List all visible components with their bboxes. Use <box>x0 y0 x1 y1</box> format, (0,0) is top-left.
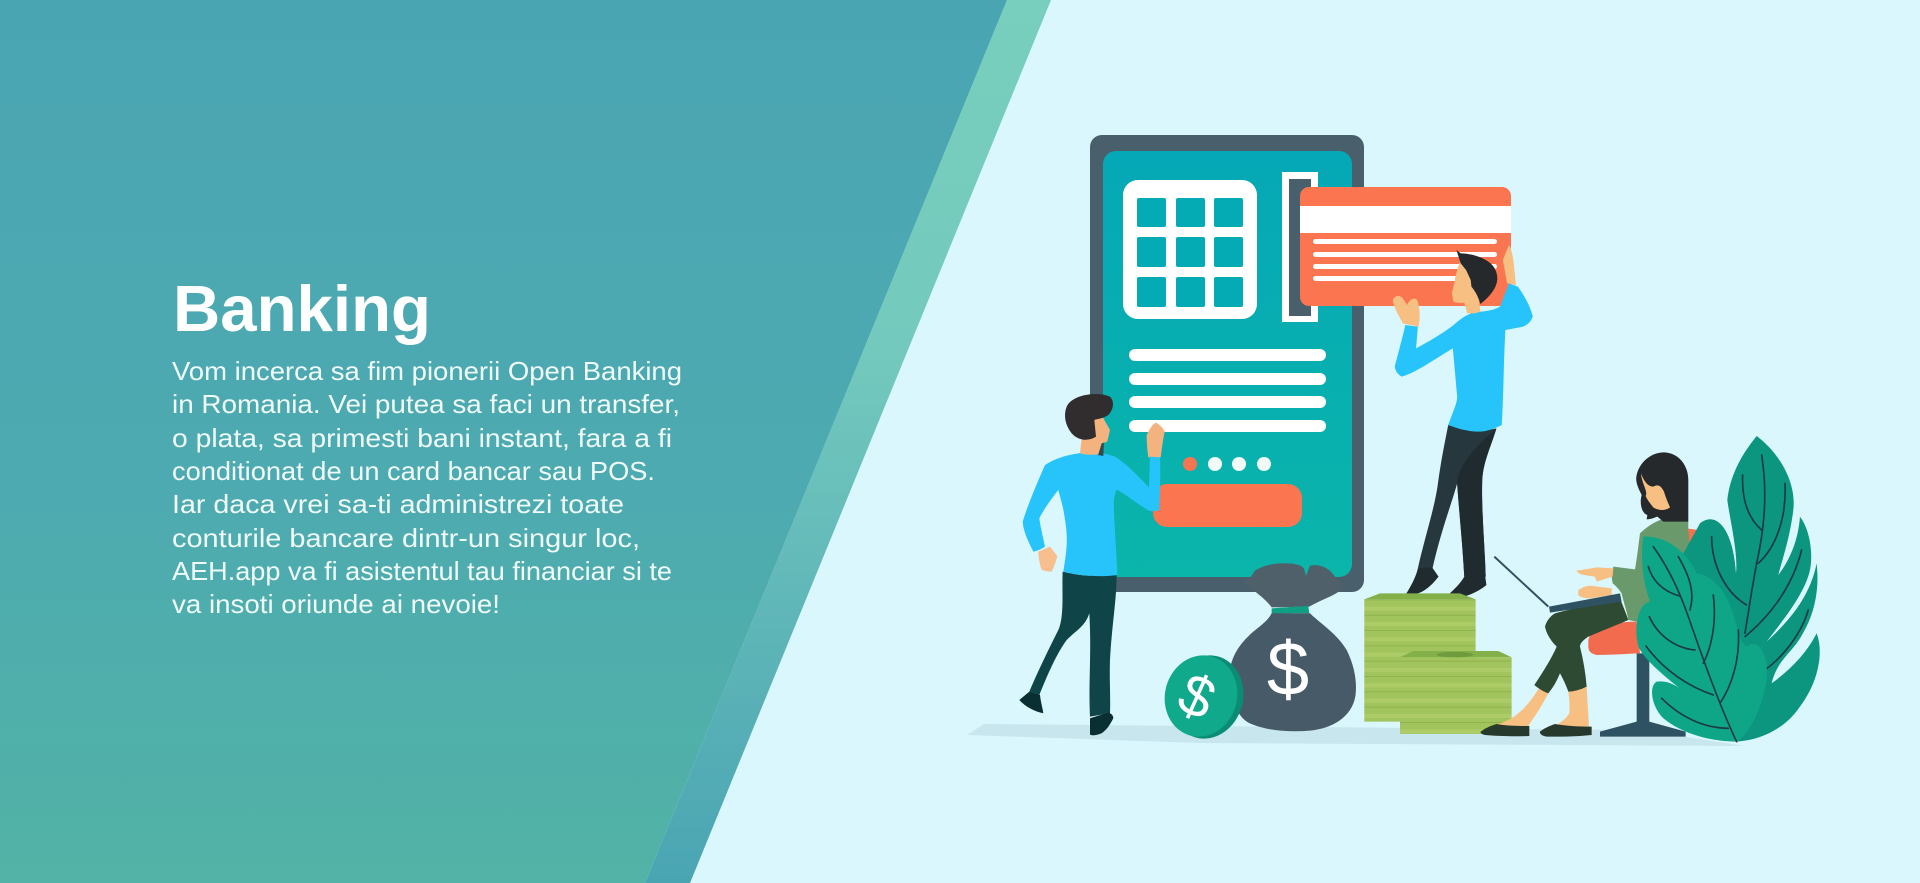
chair back <box>1677 528 1698 553</box>
shirt <box>1023 452 1160 576</box>
face <box>1641 473 1670 510</box>
money bag <box>1229 563 1356 731</box>
hands <box>1576 567 1613 582</box>
hair <box>1065 394 1113 440</box>
body text block: in Romania. Vei putea sa faci un transfer, <box>172 389 680 419</box>
lower hand <box>1038 547 1057 572</box>
raised hand <box>1393 296 1420 327</box>
coin <box>1156 647 1253 747</box>
body text block: conditionat de un card bancar sau POS. <box>172 456 655 486</box>
body text block: Iar daca vrei sa-ti administrezi toate <box>172 489 624 519</box>
hair <box>1636 452 1688 522</box>
back leaf <box>1683 436 1820 742</box>
chair seat <box>1588 622 1640 655</box>
body text block: va insoti oriunde ai nevoie! <box>172 589 500 619</box>
keypad <box>1123 180 1257 319</box>
device frame <box>1090 135 1364 592</box>
legs <box>1497 687 1548 726</box>
raised hand <box>1147 423 1165 457</box>
phone device <box>1090 135 1364 592</box>
pin dots <box>1183 457 1271 471</box>
front stack <box>1400 651 1512 734</box>
shirt <box>1395 283 1533 432</box>
shoes <box>1481 724 1529 736</box>
legs <box>1418 425 1496 577</box>
body text block: Vom incerca sa fim pionerii Open Banking <box>172 356 682 386</box>
device screen <box>1103 151 1352 577</box>
title: Banking <box>173 272 431 345</box>
card slot <box>1282 172 1318 322</box>
accent diagonal strip <box>645 0 1051 883</box>
left teal panel <box>0 0 1007 883</box>
dollar sign on bag: $ <box>1267 627 1309 712</box>
body text block <box>172 356 682 619</box>
trousers <box>1029 572 1117 717</box>
laptop <box>1494 557 1622 613</box>
man in front of device <box>1019 394 1165 735</box>
chair back lower part <box>1658 603 1672 622</box>
screen text lines <box>1129 349 1326 432</box>
bag tie <box>1272 606 1309 614</box>
trousers <box>1534 598 1628 693</box>
shoes <box>1405 567 1439 595</box>
front leaf <box>1636 537 1767 742</box>
hand on card top <box>1503 245 1516 285</box>
bank card <box>1300 187 1511 306</box>
face <box>1452 262 1480 313</box>
bag knot <box>1243 563 1343 607</box>
shoes <box>1019 692 1043 713</box>
sweater <box>1612 519 1693 622</box>
body text block: conturile bancare dintr-un singur loc, <box>172 523 640 553</box>
woman on chair with laptop <box>1481 452 1698 737</box>
bag body <box>1229 613 1356 731</box>
dollar sign on coin: $ <box>1169 660 1225 733</box>
orange button <box>1153 484 1302 527</box>
hair <box>1456 250 1497 304</box>
plant <box>1636 436 1820 742</box>
chair <box>1600 653 1686 737</box>
ground shadow <box>967 724 1745 746</box>
cash stacks <box>1364 593 1512 734</box>
man holding card <box>1393 245 1533 599</box>
body text block: o plata, sa primesti bani instant, fara a fi <box>172 423 672 453</box>
back leaf veins <box>1712 455 1808 670</box>
neck shadow <box>1098 442 1104 456</box>
front leaf veins <box>1646 547 1739 742</box>
face <box>1080 415 1110 455</box>
body text block: AEH.app va fi asistentul tau financiar si te <box>172 556 672 586</box>
rear stack <box>1364 593 1476 722</box>
